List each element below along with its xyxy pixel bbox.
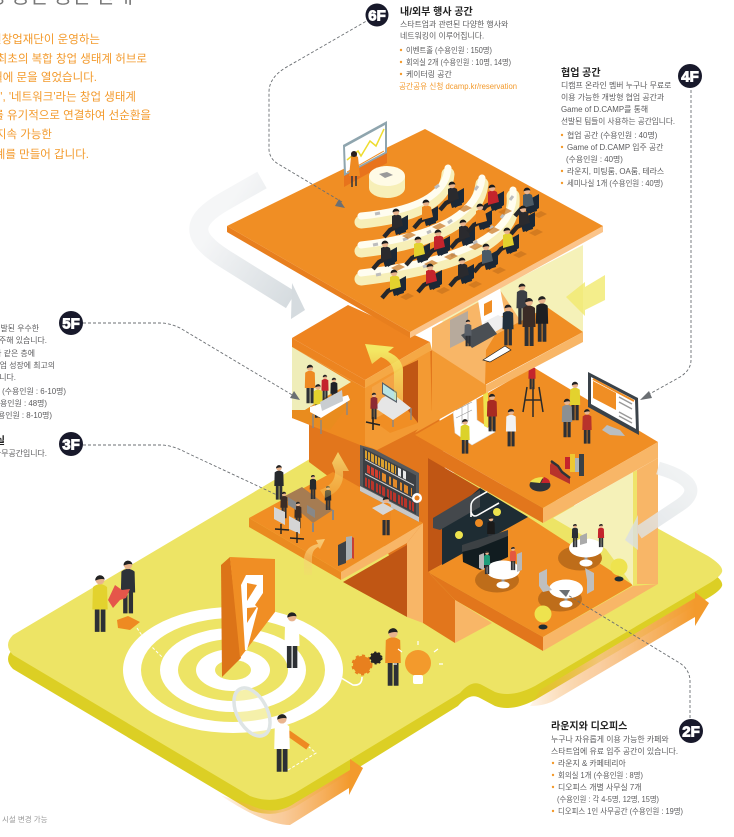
intro paragraph — [0, 32, 151, 161]
badge: 6F — [366, 4, 388, 26]
empty lounge table — [538, 568, 594, 612]
text block: 4F: 세미나실 1개 (수용인원 : 40명) — [567, 178, 663, 188]
presentation board — [343, 121, 387, 187]
lamp left — [534, 606, 552, 630]
leader line: 2F — [559, 590, 690, 718]
yellow arrow into 4F — [566, 275, 605, 316]
floor 3F: team room — [249, 442, 423, 623]
standing business team — [502, 284, 548, 346]
person on stool — [519, 363, 543, 417]
text block: 2F: 회의실 1개 (수용인원 : 8명) — [558, 770, 643, 780]
text block: 4F: Game of D.CAMP를 통해 — [561, 104, 648, 114]
text block: 2F: 라운지와 디오피스 — [551, 720, 627, 732]
text block: 4F: 라운지, 미팅룸, OA룸, 테라스 — [567, 166, 664, 176]
text block: 6F: 내/외부 행사 공간 — [400, 5, 473, 18]
pie chart — [530, 477, 550, 492]
badge: 5F: 5F — [62, 316, 80, 332]
floor 6F: event hall roof — [227, 121, 603, 338]
arrow: 3F upper — [320, 452, 349, 498]
large monitor — [588, 372, 639, 436]
text block: 4F: Game of D.CAMP 입주 공간 — [567, 142, 663, 152]
text block: 2F: 디오피스 1인 사무공간 (수용인원 : 19명) — [558, 806, 683, 816]
person with magnifier — [227, 682, 308, 772]
meeting table — [274, 465, 333, 543]
floor 5F: two rooms — [292, 305, 432, 450]
books stack — [338, 536, 354, 566]
target rings — [123, 607, 343, 733]
text block: 6F: 네트워킹이 이루어집니다. — [400, 30, 484, 40]
person at target — [284, 612, 300, 668]
logo signpost — [221, 557, 275, 677]
text block: 2F: 누구나 자유롭게 이용 가능한 카페와 — [551, 734, 669, 744]
badge: 2F: 2F — [682, 724, 700, 740]
leader line: 4F — [640, 90, 691, 400]
footnote: 시설 변경 가능 — [2, 814, 48, 824]
text block: 2F: 스타트업에 유료 입주 공간이 있습니다. — [551, 746, 678, 756]
podium — [369, 166, 405, 198]
text block: 2F — [551, 720, 683, 816]
badge: 5F — [59, 311, 83, 335]
grey arrow: right — [625, 468, 691, 550]
badge: 3F — [59, 432, 83, 456]
floor 4F: main deck body — [415, 363, 691, 651]
audience — [373, 182, 547, 300]
text block: 2F: (수용인원 : 각 4-5명, 12명, 15명) — [557, 794, 659, 804]
text block: 2F: 디오피스 개별 사무실 7개 — [558, 782, 642, 792]
text block: 6F — [399, 5, 517, 91]
floor 2F: lounge — [428, 458, 658, 651]
leader line: 6F — [269, 19, 370, 208]
floor 4F upper: co-working — [415, 245, 605, 433]
text block: 6F: 케이터링 공간 — [406, 69, 452, 79]
lounge table and people — [475, 547, 522, 592]
text block: 2F: 라운지 & 카페테리아 — [558, 758, 626, 768]
arrow: 3F lower — [304, 539, 325, 575]
meeting room with team — [292, 347, 352, 434]
text block: 6F: 스타트업과 관련된 다양한 행사와 — [400, 19, 508, 29]
individual desk room — [366, 360, 418, 433]
text block: 6F: 회의실 2개 (수용인원 : 10명, 14명) — [406, 57, 511, 67]
text block: 4F: 디캠프 온라인 멤버 누구나 무료로 — [561, 80, 671, 90]
bar charts — [550, 454, 584, 484]
building core — [309, 350, 455, 643]
text block: 4F — [561, 66, 675, 188]
bookshelf monitor — [360, 442, 422, 522]
text block: 6F: 이벤트홀 (수용인원 : 150명) — [406, 45, 492, 55]
badge: 4F: 4F — [681, 68, 699, 86]
orange gradient arrow: front-right edge — [530, 592, 709, 706]
grey arrow: upper left flow into building — [199, 180, 305, 319]
curved desks — [361, 168, 513, 279]
white dashed paths on platform — [137, 628, 316, 770]
people with puzzle — [92, 561, 140, 632]
person in orange with laptop — [372, 497, 394, 535]
text block: 4F: 협업 공간 (수용인원 : 40명) — [567, 130, 658, 140]
badge: 3F: 3F — [62, 436, 80, 454]
text block: 4F: (수용인원 : 40명) — [566, 154, 623, 164]
cafe bar — [433, 486, 528, 570]
text block: 3F — [0, 434, 47, 458]
lamp right — [610, 558, 628, 582]
text block: 6F: 공간공유 신청 dcamp.kr/reservation — [399, 81, 517, 91]
text block: 5F — [0, 323, 66, 420]
team at large monitor — [562, 382, 592, 444]
yellow platform base — [8, 442, 722, 814]
badge: 2F — [679, 719, 703, 743]
text block: 4F: 협업 공간 — [561, 66, 601, 79]
lounge table with laptop — [558, 524, 604, 570]
leader line: 3F — [83, 445, 277, 495]
text block: 4F: 선발된 팀들이 사용하는 공간입니다. — [561, 116, 675, 126]
orange gradient arrow: front-left edge — [220, 759, 363, 825]
person with gears and light bulb — [333, 628, 443, 686]
text block: 4F: 이용 가능한 개방형 협업 공간과 — [561, 92, 664, 102]
presenter — [349, 151, 360, 187]
poster and desk — [450, 288, 512, 362]
blueprint and team — [452, 387, 516, 454]
leader line: 5F — [83, 323, 300, 400]
arrow: 5F — [365, 344, 403, 400]
badge: 6F: 6F — [368, 8, 386, 24]
badge: 4F — [678, 64, 702, 88]
